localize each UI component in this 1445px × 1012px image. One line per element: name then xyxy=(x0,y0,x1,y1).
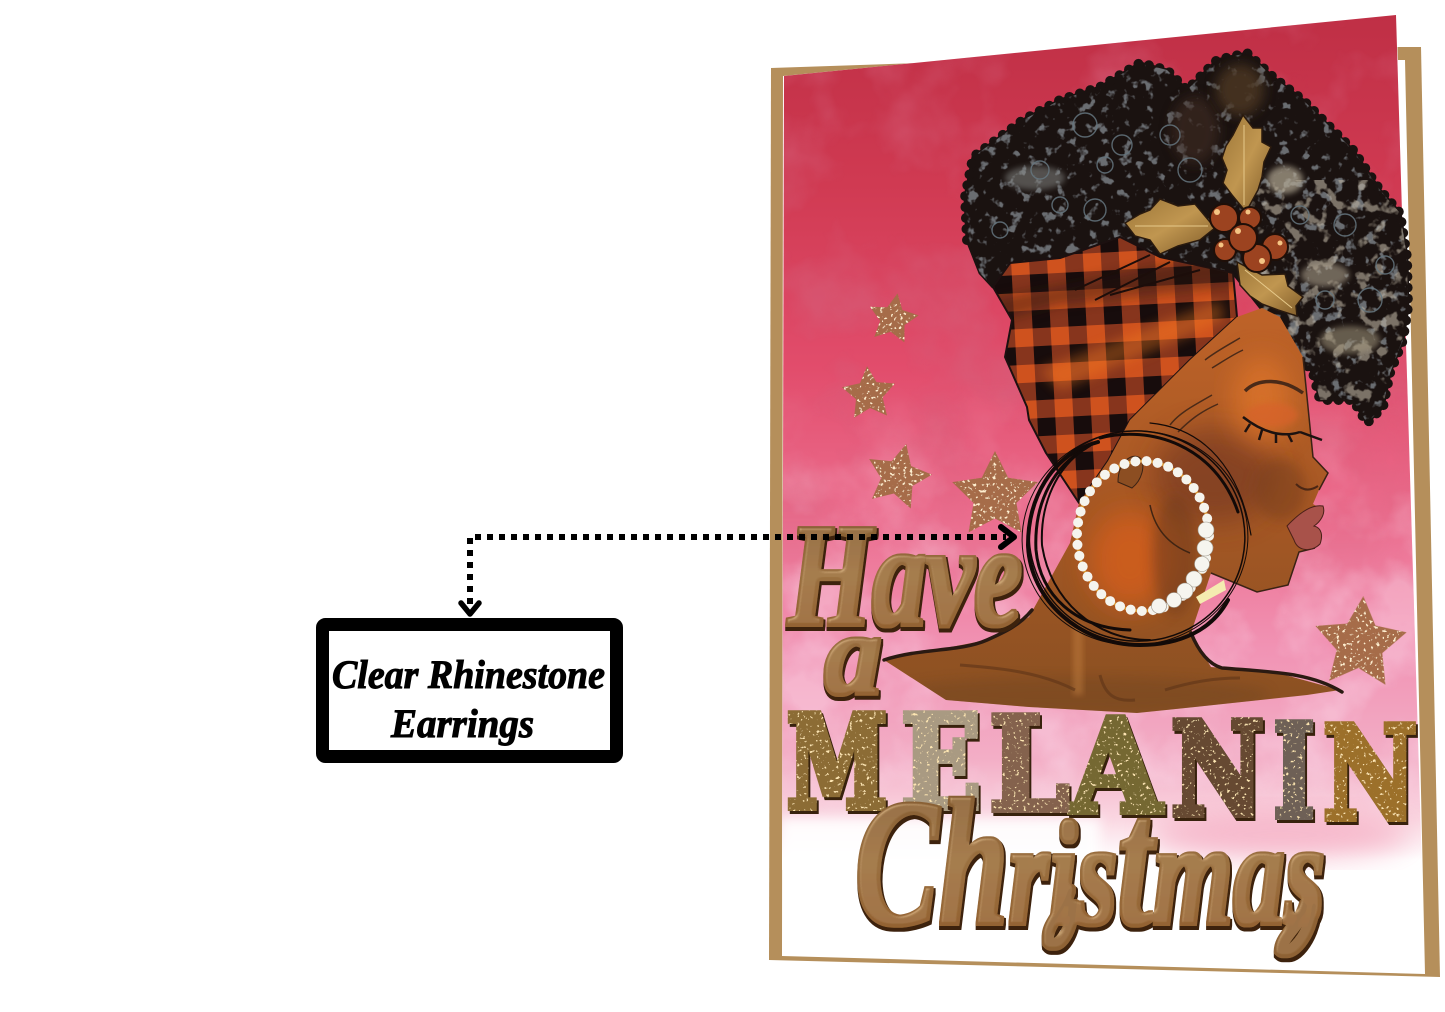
upper right arc xyxy=(1100,434,1238,512)
small rhinestones xyxy=(1077,461,1209,611)
illustration: face and shoulders xyxy=(884,308,1342,713)
ear xyxy=(1118,456,1143,488)
nostril xyxy=(1296,484,1318,490)
berry highlights xyxy=(1214,209,1282,264)
holly leaf top xyxy=(1222,115,1271,212)
skin xyxy=(884,308,1340,713)
descender loops xyxy=(1048,890,1314,952)
berries xyxy=(1210,204,1288,272)
leaf veins xyxy=(1135,125,1292,308)
hair curls edge xyxy=(965,53,1408,423)
greeting text: MELANIN: I xyxy=(1274,695,1314,848)
script letters: Christmas xyxy=(855,760,1325,965)
hoop setting xyxy=(1077,461,1209,611)
greeting text: a: a xyxy=(824,589,882,720)
greeting text: Have: Have xyxy=(787,494,1022,658)
eyeshadow xyxy=(1246,403,1298,427)
greeting text: MELANIN: E xyxy=(901,686,981,839)
greeting text: MELANIN: N xyxy=(1171,693,1264,846)
thick left and bottom arc xyxy=(1028,442,1228,645)
kraft envelope xyxy=(769,47,1440,977)
hand-drawn highlight circle xyxy=(1008,411,1264,661)
icon: stars xyxy=(840,289,1409,686)
temple baby hair xyxy=(1170,338,1243,432)
hair highlights xyxy=(960,50,1410,430)
wrap fabric xyxy=(993,237,1237,503)
dotted connector arrow xyxy=(461,527,1014,614)
callout text: Earrings xyxy=(390,701,534,746)
illustration: hair xyxy=(960,50,1410,430)
holly leaf left xyxy=(1125,199,1215,254)
callout: Clear Rhinestone Earrings xyxy=(322,624,616,756)
greeting text: MELANIN: M xyxy=(787,686,887,839)
wrap shading xyxy=(985,250,1240,390)
callout box xyxy=(322,624,616,756)
large rhinestones xyxy=(1152,522,1214,614)
greeting text: Christmas xyxy=(855,760,1325,965)
illustration: plaid headwrap xyxy=(985,237,1240,503)
greeting text: MELANIN: A xyxy=(1069,690,1163,843)
panel: watercolour background xyxy=(780,10,1430,878)
card paper xyxy=(782,15,1425,974)
lips xyxy=(1287,506,1324,550)
arrowhead down xyxy=(461,603,479,614)
greeting text: MELANIN: N xyxy=(1323,697,1417,850)
callout text: Clear Rhinestone xyxy=(332,652,605,697)
closed eye lashes xyxy=(1243,417,1322,443)
illustration: holly and berries xyxy=(1125,115,1303,316)
eyebrow xyxy=(1245,381,1303,393)
greeting text: MELANIN: L xyxy=(989,688,1069,841)
rhinestone hoop earring xyxy=(1077,461,1226,614)
neck and shoulder outline xyxy=(884,610,1342,692)
callout text xyxy=(332,652,605,746)
greeting text: MELANIN xyxy=(787,686,1417,850)
earring yellow shine xyxy=(1196,580,1226,604)
greeting card xyxy=(780,10,1430,974)
hair mass xyxy=(965,53,1408,423)
face outline xyxy=(1211,357,1328,592)
arrowhead right xyxy=(1001,527,1014,547)
skin shading xyxy=(890,356,1306,713)
holly leaf bottom xyxy=(1237,262,1303,316)
dotted line xyxy=(470,537,1006,604)
